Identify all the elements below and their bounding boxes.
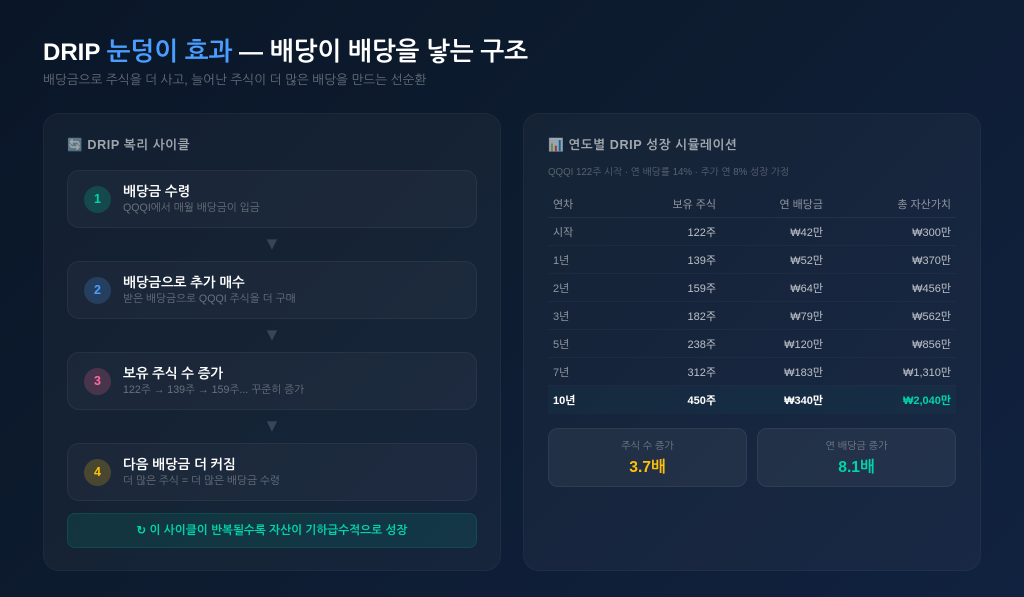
row: year 10 highlight: 450주 [688, 395, 716, 407]
callout [67, 513, 477, 548]
stat value: 8.1배 [838, 459, 875, 476]
step 1 title: 배당금 수령 [123, 184, 190, 199]
arrow 2: ▼ [267, 327, 277, 343]
title: DRIP 눈덩이 효과 — 배당이 배당을 낳는 구조 [43, 38, 528, 66]
row: year 10 highlight: ₩2,040만 [903, 395, 951, 407]
panel: DRIP cycle [43, 113, 501, 571]
row: start: 시작 [553, 227, 573, 239]
row: year 2 [548, 274, 956, 302]
cycle heading: 🔄 DRIP 복리 사이클 [67, 138, 190, 152]
row: year 1: 139주 [688, 255, 716, 267]
stat label: 연 배당금 증가 [826, 441, 887, 452]
row: year 7: ₩183만 [784, 367, 823, 379]
step 4 description: 더 많은 주식 = 더 많은 배당금 수령 [123, 475, 280, 487]
table header: 보유 주식 [672, 199, 716, 211]
row: year 3: 3년 [553, 311, 569, 323]
step 2 title: 배당금으로 추가 매수 [123, 275, 245, 290]
step 3 number: 3 [94, 374, 101, 388]
stat: shares growth [548, 428, 747, 487]
row: year 5: 238주 [688, 339, 716, 351]
step 3 [67, 352, 477, 410]
row: year 3 [548, 302, 956, 330]
table header: 연차 [553, 199, 573, 211]
row: year 2: 2년 [553, 283, 569, 295]
step 1 [67, 170, 477, 228]
row: year 5: 5년 [553, 339, 569, 351]
step 2 description: 받은 배당금으로 QQQI 주식을 더 구매 [123, 293, 296, 305]
row: year 10 highlight [548, 386, 956, 414]
step 3 number [84, 368, 111, 395]
row: start [548, 218, 956, 246]
row: year 7 [548, 358, 956, 386]
stat: dividend growth [757, 428, 956, 487]
subtitle: 배당금으로 주식을 더 사고, 늘어난 주식이 더 많은 배당을 만드는 선순환 [43, 73, 426, 87]
row: year 5: ₩120만 [784, 339, 823, 351]
row: year 7: 7년 [553, 367, 569, 379]
row: year 2: ₩456만 [912, 283, 951, 295]
row: year 1: ₩52만 [790, 255, 823, 267]
row: start: ₩42만 [790, 227, 823, 239]
row: year 2: ₩64만 [790, 283, 823, 295]
arrow 3: ▼ [267, 418, 277, 434]
row: year 1: ₩370만 [912, 255, 951, 267]
row: year 1: 1년 [553, 255, 569, 267]
arrow 1: ▼ [267, 236, 277, 252]
row: year 3: ₩79만 [790, 311, 823, 323]
stat value: 3.7배 [629, 459, 666, 476]
step 4 number [84, 459, 111, 486]
step 3 title: 보유 주식 수 증가 [123, 366, 223, 381]
row: year 7: 312주 [688, 367, 716, 379]
row: year 10 highlight: 10년 [553, 395, 575, 407]
table header: 연 배당금 [779, 199, 823, 211]
row: year 3: ₩562만 [912, 311, 951, 323]
callout: ↻ 이 사이클이 반복될수록 자산이 기하급수적으로 성장 [136, 524, 407, 537]
row: year 5: ₩856만 [912, 339, 951, 351]
row: year 5 [548, 330, 956, 358]
step 4 title: 다음 배당금 더 커짐 [123, 457, 236, 472]
step 2 number [84, 277, 111, 304]
table header [548, 190, 956, 218]
row: start: 122주 [688, 227, 716, 239]
step 4 number: 4 [94, 465, 101, 479]
row: year 7: ₩1,310만 [903, 367, 951, 379]
stat label: 주식 수 증가 [621, 441, 674, 452]
step 1 number [84, 186, 111, 213]
row: start: ₩300만 [912, 227, 951, 239]
panel: yearly simulation [523, 113, 981, 571]
step 1 description: QQQI에서 매월 배당금이 입금 [123, 202, 260, 214]
row: year 3: 182주 [688, 311, 716, 323]
step 4 [67, 443, 477, 501]
step 3 description: 122주 → 139주 → 159주... 꾸준히 증가 [123, 384, 304, 396]
simulation heading: 📊 연도별 DRIP 성장 시뮬레이션 [548, 138, 737, 152]
row: year 10 highlight: ₩340만 [784, 395, 823, 407]
row: year 2: 159주 [688, 283, 716, 295]
row: year 1 [548, 246, 956, 274]
table header: 총 자산가치 [897, 199, 951, 211]
simulation assumptions: QQQI 122주 시작 · 연 배당률 14% · 주가 연 8% 성장 가정 [548, 167, 789, 178]
step 2 number: 2 [94, 283, 101, 297]
step 1 number: 1 [94, 192, 101, 206]
step 2 [67, 261, 477, 319]
